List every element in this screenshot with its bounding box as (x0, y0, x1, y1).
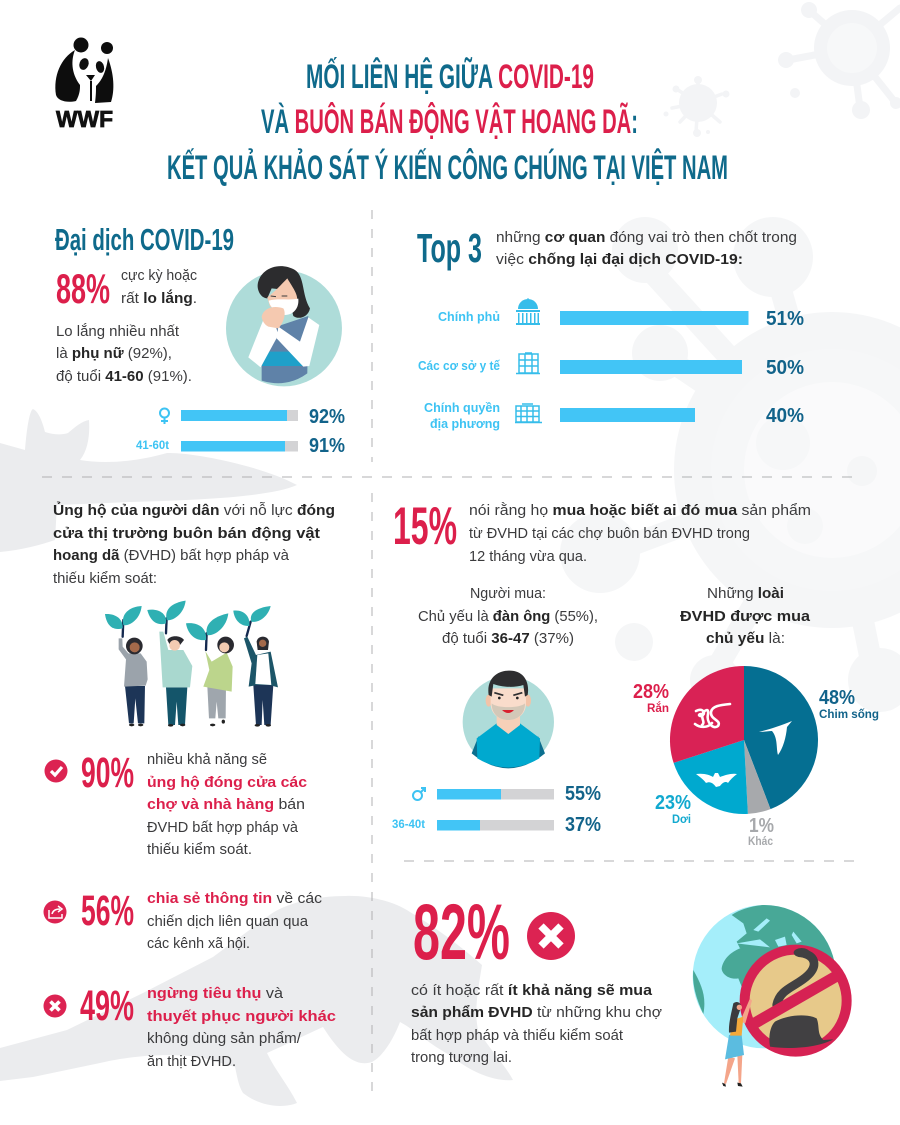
text: support intro: thiếu kiểm soát: (53, 571, 157, 587)
illustration: man (463, 671, 554, 768)
text: 82% statement (411, 983, 663, 1066)
bar row: Chính phủ 51% (438, 298, 804, 330)
pie label: 28% snakes: Rắn (647, 700, 669, 715)
text: species heading: ĐVHD được mua (680, 609, 811, 625)
title (167, 57, 728, 187)
text: 82% statement: trong tương lai. (411, 1050, 512, 1066)
stat row: 90%: ủng hộ đóng cửa các (147, 775, 307, 791)
text: most worried groups: Lo lắng nhiều nhất (56, 323, 179, 340)
text: purchase statement: nói rằng họ mua hoặc biết ai đó mua sản phẩm (469, 502, 811, 519)
text: very worried (121, 268, 197, 307)
stat row: 49%: 49% (80, 982, 134, 1030)
icon: share (44, 900, 66, 924)
divider: vertical dashed line (371, 210, 373, 1096)
bar: age 41-60 91%: 41-60t (136, 440, 169, 452)
text: support intro: Ủng hộ của người dân với nỗ lực đóng (53, 501, 335, 519)
text: buyer profile: Chủ yếu là đàn ông (55%), (418, 609, 598, 625)
stat row: 49%: thuyết phục người khác (147, 1009, 336, 1025)
text: 82% statement: sản phẩm ĐVHD từ những khu chợ (411, 1005, 663, 1021)
title: MỐI LIÊN HỆ GIỮA COVID-19 (306, 57, 594, 96)
stat row: 56% (44, 887, 322, 952)
pie label: 28% snakes (633, 681, 669, 715)
background: large virus (560, 217, 900, 712)
text: purchase statement: 12 tháng vừa qua. (469, 549, 587, 565)
text: species heading: Những loài (707, 586, 784, 602)
pie label: 23% bats: 23% (655, 792, 691, 814)
icon: check (44, 760, 68, 782)
title: VÀ BUÔN BÁN ĐỘNG VẬT HOANG DÃ: (261, 102, 638, 141)
bar: male 55% (413, 783, 601, 805)
icon: snake (695, 704, 730, 727)
text: very worried: cực kỳ hoặc (121, 268, 197, 284)
logo: WWF panda (55, 38, 113, 132)
bar row: Các cơ sở y tế 50%: Các cơ sở y tế (418, 358, 501, 373)
text: species heading: chủ yếu là: (706, 631, 785, 647)
text: species heading (680, 586, 811, 647)
bar: male 55%: 55% (565, 783, 601, 805)
bar row: Chính quyền địa phương 40%: địa phương (430, 416, 500, 431)
icon: bird (759, 721, 792, 755)
stat: 15%: 15% (393, 497, 457, 556)
panel: top 3 institutions (417, 225, 804, 431)
icon: cross (44, 994, 66, 1018)
text: 82% statement: có ít hoặc rất ít khả năng sẽ mua (411, 983, 653, 999)
icon: hospital (516, 353, 540, 374)
icon: large cross (527, 912, 575, 960)
stat row: 90%: thiếu kiểm soát. (147, 842, 252, 858)
text: buyer profile: Người mua: (470, 586, 546, 602)
stat: 82%: 82% (413, 887, 510, 976)
bar row: Chính phủ 51%: Chính phủ (438, 309, 500, 324)
pie label: 23% bats (655, 792, 691, 826)
bar row: Các cơ sở y tế 50% (418, 353, 804, 379)
text: most worried groups: độ tuổi 41-60 (91%). (56, 369, 192, 385)
background: pangolin silhouette (0, 896, 513, 1106)
pie label: 23% bats: Dơi (672, 812, 691, 826)
text: key institutions (496, 230, 797, 268)
stat row: 90%: 90% (81, 749, 134, 797)
background: bat silhouette (0, 409, 297, 552)
bar row: Các cơ sở y tế 50%: 50% (766, 357, 804, 379)
text: most worried groups (56, 323, 192, 385)
stat row: 49%: ăn thịt ĐVHD. (147, 1054, 236, 1070)
stat row: 49%: không dùng sản phẩm/ (147, 1031, 302, 1047)
illustration: four people holding plants (105, 601, 278, 727)
bar: age 36-40 37% (392, 814, 601, 836)
bar: age 36-40 37%: 36-40t (392, 819, 425, 831)
background: top-right virus (664, 2, 900, 137)
text: support intro: cửa thị trường buôn bán động vật (53, 526, 320, 542)
icon: male symbol (413, 788, 425, 800)
illustration: globe with banned snake (693, 904, 847, 1087)
text: buyer profile: độ tuổi 36-47 (37%) (442, 631, 574, 647)
panel: public support (44, 501, 336, 1070)
text: purchase statement (469, 502, 811, 565)
panel: 82% future intention (411, 887, 847, 1087)
text: very worried: rất lo lắng. (121, 289, 197, 307)
text: support intro: hoang dã (ĐVHD) bất hợp pháp và (53, 548, 290, 564)
pie chart: species (670, 666, 818, 814)
stat row: 56%: chiến dịch liên quan qua (147, 914, 309, 930)
stat row: 90%: nhiều khả năng sẽ (147, 752, 267, 768)
logo: WWF panda: WWF (56, 106, 113, 132)
text: key institutions: việc chống lại đại dịch COVID-19: (496, 252, 743, 268)
panel: buyers (392, 497, 879, 848)
pie label: 1% other: Khác (748, 834, 773, 848)
pie label: 48% swiftlets: 48% (819, 687, 855, 709)
text: buyer profile (418, 586, 598, 647)
pie label: 1% other (748, 815, 774, 848)
icon: female symbol (160, 408, 169, 424)
stat row: 90%: chợ và nhà hàng bán (147, 797, 305, 813)
pie label: 28% snakes: 28% (633, 681, 669, 703)
pie label: 1% other: 1% (749, 815, 774, 837)
panel: COVID-19 pandemic (55, 222, 345, 457)
text: most worried groups: là phụ nữ (92%), (56, 346, 172, 362)
bar: female 92%: 92% (309, 406, 345, 428)
bar: age 36-40 37%: 37% (565, 814, 601, 836)
stat row: 49% (44, 982, 336, 1070)
text: purchase statement: từ ĐVHD tại các chợ buôn bán ĐVHD trong (469, 526, 750, 542)
text: support intro (53, 501, 335, 587)
pie label: 48% swiftlets: Chim sống (819, 707, 879, 721)
bar: age 41-60 91%: 91% (309, 435, 345, 457)
stat row: 56%: chia sẻ thông tin về các (147, 891, 322, 907)
bar: female 92% (160, 406, 345, 428)
pie label: 48% swiftlets (819, 687, 879, 721)
stat row: 90%: ĐVHD bất hợp pháp và (147, 820, 299, 836)
heading: Đại dịch COVID-19: Đại dịch COVID-19 (55, 222, 234, 257)
stat row: 90% (44, 749, 307, 858)
bar row: Chính quyền địa phương 40%: 40% (766, 405, 804, 427)
stat row: 49%: ngừng tiêu thụ và (147, 986, 284, 1002)
bar row: Chính quyền địa phương 40%: Chính quyền (424, 400, 500, 415)
icon: government dome (516, 298, 540, 325)
text: key institutions: những cơ quan đóng vai trò then chốt trong (496, 230, 797, 246)
heading: Top 3: Top 3 (417, 225, 482, 271)
bar row: Chính phủ 51%: 51% (766, 308, 804, 330)
illustration: woman with mask (226, 266, 342, 386)
icon: bat (696, 773, 737, 787)
stat row: 56%: các kênh xã hội. (147, 936, 250, 952)
bar: age 41-60 91% (136, 435, 345, 457)
text: 82% statement: bất hợp pháp và thiếu kiểm soát (411, 1028, 623, 1044)
bar row: Chính quyền địa phương 40% (424, 400, 804, 431)
icon: office building (515, 404, 542, 422)
stat row: 56%: 56% (81, 887, 134, 935)
stat: 88%: 88% (56, 265, 110, 312)
divider: horizontal dashed line (42, 477, 860, 861)
